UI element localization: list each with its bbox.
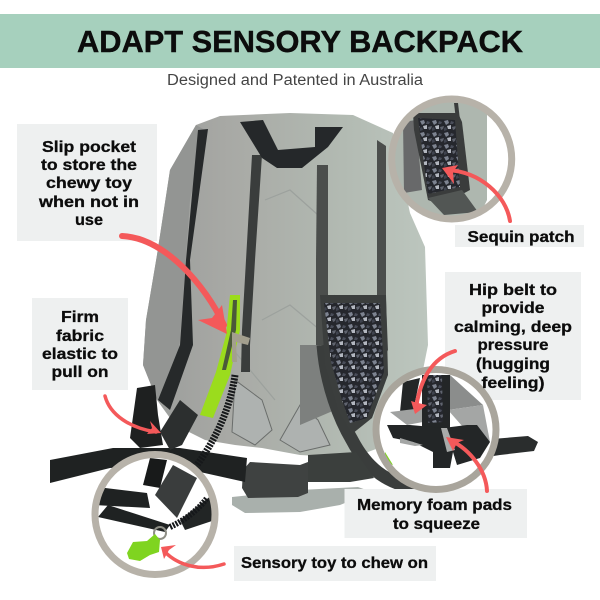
inset circle: hip belt and pads close-up: [370, 365, 502, 495]
outer right strap: [377, 140, 388, 362]
backpack photo: [50, 113, 538, 513]
label: memory foam: to squeeze: [393, 516, 480, 533]
subtitle: Designed and Patented in Australia: [167, 72, 423, 89]
label text: hip belt: calming, deep: [454, 319, 572, 336]
green zipper pocket: [200, 295, 240, 418]
inner right strap: [316, 165, 328, 345]
label text: hip belt: Hip belt to: [469, 282, 557, 299]
label: memory foam: Memory foam pads: [357, 497, 512, 514]
label: firm fabric elastic: Firm: [61, 309, 99, 326]
arrow: memory foam: [446, 437, 487, 491]
arrow: hip belt: [411, 351, 455, 414]
label: slip pocket: to store the: [41, 157, 137, 174]
velcro tab: [160, 400, 198, 450]
label: slip pocket: when not in: [38, 194, 139, 211]
label: sensory toy: Sensory toy to chew on: [241, 555, 428, 572]
label text: hip belt: [454, 282, 572, 392]
label: sequin patch: Sequin patch: [468, 229, 574, 246]
faded shadow under bag: [232, 487, 372, 513]
belt centre webbing: [308, 452, 374, 482]
arrow: sequin patch: [442, 165, 510, 221]
label text: hip belt: (hugging: [476, 356, 550, 373]
label: firm fabric elastic: [32, 298, 128, 390]
label: sensory toy: [234, 546, 436, 581]
title banner: [0, 14, 600, 68]
sequin pocket: [320, 295, 388, 434]
label: slip pocket: Slip pocket: [42, 139, 137, 156]
left shoulder strap: [158, 129, 208, 410]
label text: hip belt: feeling): [482, 375, 544, 392]
label text: hip belt: provide: [482, 300, 545, 317]
label text: hip belt: pressure: [478, 337, 549, 354]
label: memory foam: [344, 489, 527, 538]
arrow: firm elastic: [105, 396, 161, 434]
label: firm fabric elastic: pull on: [52, 364, 108, 381]
label: slip pocket: chewy toy: [46, 175, 132, 192]
label: firm fabric elastic: fabric: [56, 328, 104, 345]
label: firm fabric elastic: elastic to: [42, 346, 118, 363]
coiled cord: [197, 375, 235, 465]
right hip belt end: [480, 436, 538, 458]
inset circle: chewy toy close-up: [92, 451, 218, 578]
inner left strap: [241, 155, 262, 372]
inset circle: sequin patch close-up: [385, 95, 520, 225]
arrow: sensory toy: [161, 545, 224, 567]
side panel shading: [143, 125, 205, 400]
curved strap under pocket: [323, 345, 420, 488]
label box: hip belt: [445, 272, 581, 400]
arrow: slip pocket: [122, 236, 227, 334]
centre buckle: [242, 462, 308, 498]
label: slip pocket: [17, 124, 157, 241]
left belt strap: [50, 448, 247, 483]
grab handle: [240, 120, 343, 168]
title banner: ADAPT SENSORY BACKPACK: [77, 24, 524, 59]
label: slip pocket: use: [75, 212, 103, 229]
dark lower panel: [300, 345, 335, 425]
quilting lines: [235, 190, 335, 400]
lumbar pads: [232, 380, 330, 452]
backpack body: [143, 113, 428, 458]
left side loop: [130, 385, 163, 448]
label: sequin patch: [455, 225, 584, 247]
zipper clip: [232, 332, 250, 362]
